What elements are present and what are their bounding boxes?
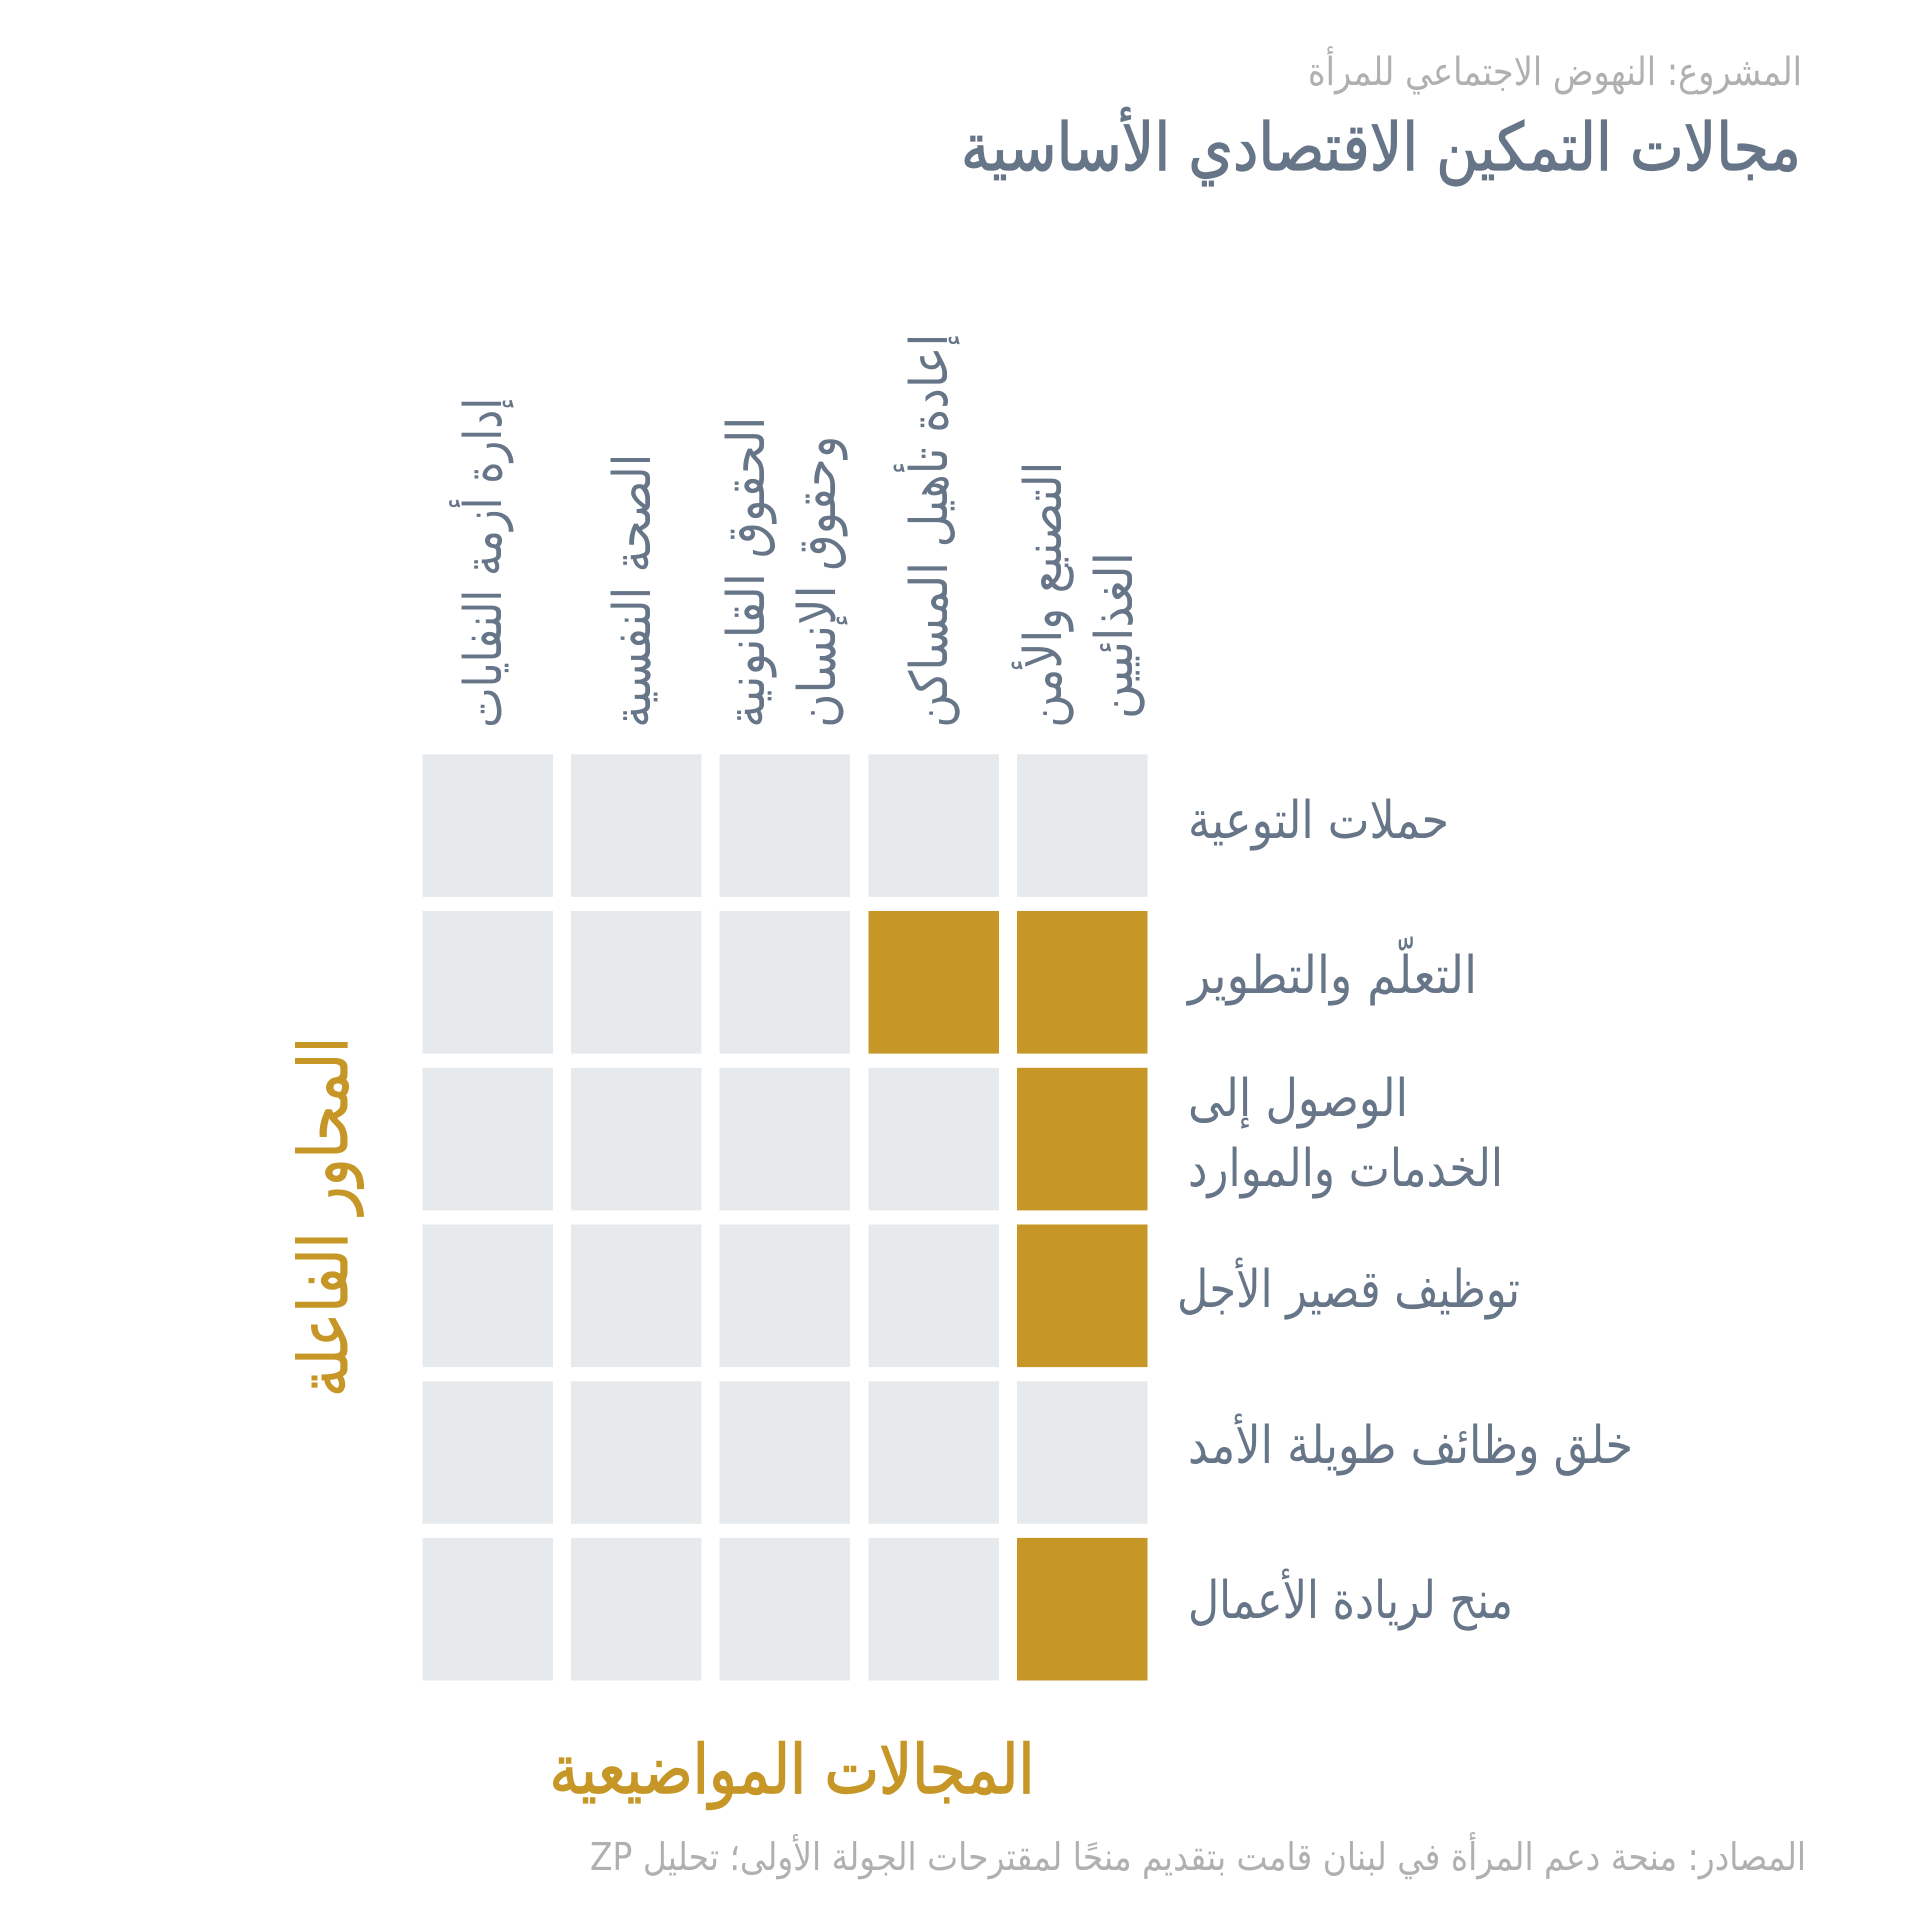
title: مجالات التمكين الاقتصادي الأساسية: [961, 106, 1801, 186]
matrix grid: [422, 754, 1148, 1680]
column label: legal and human rights: الحقوق القانونية: [717, 417, 777, 728]
column label: manufacturing and food security: الغذائيين: [1085, 552, 1145, 719]
row 6 cells: entrepreneurship grants: [422, 1538, 1148, 1680]
row label: long-term job creation: خلق وظائف طويلة الأمد: [1188, 1413, 1633, 1476]
row label: access to services and resources: الوصول إلى: [1188, 1069, 1408, 1129]
subtitle: project name: المشروع: النهوض الاجتماعي للمرأة: [1308, 46, 1802, 95]
column label: manufacturing and food security: [1011, 462, 1145, 728]
row label: awareness campaigns: حملات التوعية: [1188, 791, 1449, 851]
row label: access to services and resources: [1188, 1069, 1503, 1199]
column label: mental health: الصحة النفسية: [603, 454, 663, 728]
row label: entrepreneurship grants: منح لريادة الأعمال: [1188, 1568, 1513, 1631]
horizontal axis title: thematic areas: المجالات المواضيعية: [550, 1731, 1034, 1810]
column label: legal and human rights: [717, 417, 848, 728]
row label: access to services and resources: الخدمات والموارد: [1188, 1139, 1503, 1199]
row 1 cells: awareness campaigns: [422, 754, 1148, 897]
row 5 cells: long-term job creation: [422, 1381, 1148, 1524]
column label: housing rehabilitation: إعادة تأهيل المساكن: [893, 334, 960, 728]
column label: legal and human rights: وحقوق الإنسان: [788, 436, 848, 728]
row label: learning and development: التعلّم والتطوير: [1185, 937, 1477, 1006]
column label: waste crisis management: إدارة أزمة النفايات: [449, 398, 514, 728]
vertical axis title: actors: المحاور الفاعلة: [285, 1037, 364, 1397]
row label: short-term employment: توظيف قصير الأجل: [1177, 1257, 1520, 1320]
row 4 cells: short-term employment: [422, 1224, 1148, 1367]
row 3 cells: access to services and resources: [422, 1068, 1148, 1210]
row 2 cells: learning and development: [422, 911, 1148, 1054]
column labels: thematic areas: [449, 334, 1145, 728]
row labels: actors: [1177, 791, 1633, 1631]
column label: manufacturing and food security: التصنيع والأمن: [1011, 462, 1074, 728]
